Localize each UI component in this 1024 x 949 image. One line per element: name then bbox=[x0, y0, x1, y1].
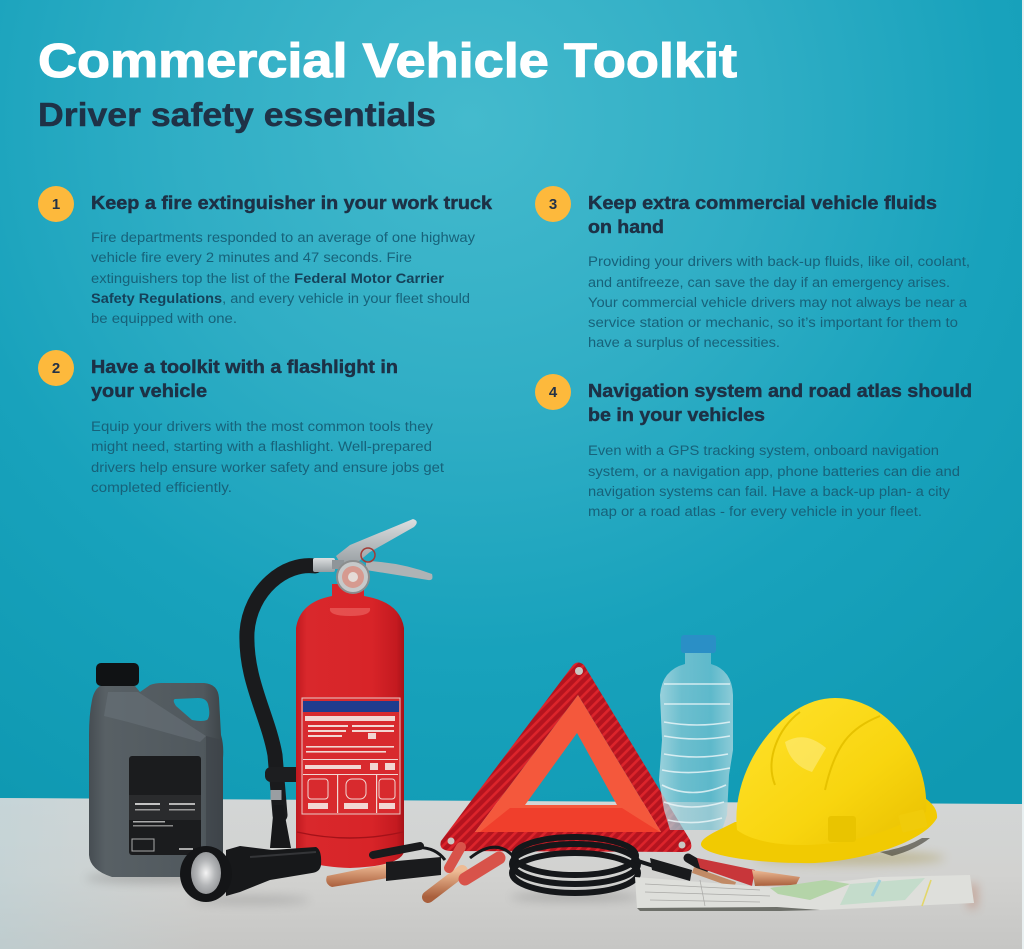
body 2 bbox=[91, 419, 444, 496]
jug body bbox=[89, 683, 223, 877]
heading 2: your vehicle bbox=[91, 380, 207, 401]
body 2: completed efficiently. bbox=[91, 480, 232, 496]
body 4: system, or a navigation app, phone batteries can die and bbox=[588, 464, 960, 480]
bottle body bbox=[659, 653, 733, 830]
title: Commercial Vehicle Toolkit bbox=[38, 35, 737, 88]
body 2: might need, starting with a flashlight. Well-prepared bbox=[91, 439, 432, 455]
second clamp pair bbox=[650, 858, 800, 886]
icon: fire extinguisher bbox=[247, 519, 432, 868]
icon: road map bbox=[635, 875, 974, 911]
number badge 2 bbox=[38, 350, 74, 386]
body 4: Even with a GPS tracking system, onboard navigation bbox=[588, 443, 939, 459]
body 4 bbox=[588, 443, 960, 520]
table surface bbox=[0, 798, 1024, 949]
body 3: and antifreeze, can save the day if an emergency arises. bbox=[588, 275, 950, 291]
tip 2: toolkit with flashlight bbox=[38, 350, 444, 496]
helmet ridges bbox=[772, 712, 880, 790]
body 1 bbox=[91, 230, 476, 327]
heading 4: Navigation system and road atlas should bbox=[588, 380, 972, 401]
body 3: Your commercial vehicle drivers may not always be near a bbox=[588, 295, 967, 311]
jug cap bbox=[96, 663, 139, 686]
heading 3: Keep extra commercial vehicle fluids bbox=[588, 192, 937, 213]
icon: yellow hard hat bbox=[701, 698, 937, 863]
bottle water ripples bbox=[662, 684, 730, 823]
heading 3 bbox=[588, 192, 937, 237]
tip 3: extra fluids bbox=[535, 186, 970, 351]
body 3 bbox=[588, 254, 970, 351]
tip 4: navigation bbox=[535, 374, 972, 520]
extinguisher cylinder bbox=[296, 584, 404, 868]
extinguisher valve and levers bbox=[313, 519, 432, 593]
icon: water bottle bbox=[659, 635, 733, 830]
helmet brim bbox=[701, 798, 937, 863]
triangle outer reflective frame bbox=[440, 662, 691, 852]
body 4: map or a road atlas - for every vehicle in your fleet. bbox=[588, 504, 922, 520]
icon: warning triangle bbox=[440, 662, 691, 852]
number badge 1: 1 bbox=[52, 196, 60, 213]
extinguisher hose bbox=[247, 566, 315, 848]
body 4: navigation systems can fail. Have a back-up plan- a city bbox=[588, 484, 951, 500]
number badge 2: 2 bbox=[52, 360, 60, 377]
number badge 4: 4 bbox=[549, 384, 558, 401]
heading 1: Keep a fire extinguisher in your work truck bbox=[91, 192, 493, 213]
icon: jumper cables bbox=[326, 837, 800, 897]
subtitle: Driver safety essentials bbox=[38, 96, 436, 133]
red clamp bbox=[428, 847, 499, 897]
helmet dome bbox=[736, 698, 926, 845]
heading 2 bbox=[91, 356, 398, 401]
triangle inner orange band bbox=[475, 695, 661, 832]
body 1: Fire departments responded to an average of one highway bbox=[91, 230, 476, 246]
cable coil bbox=[395, 837, 660, 893]
icon: flashlight bbox=[180, 846, 321, 902]
body 1: Safety Regulations, and every vehicle in your fleet should bbox=[91, 291, 470, 307]
black clamp bbox=[326, 846, 441, 887]
heading 4: be in your vehicles bbox=[588, 404, 765, 425]
icon: oil jug bbox=[89, 663, 223, 877]
body 3: service station or mechanic, so it’s important for them to bbox=[588, 315, 958, 331]
number badge 3: 3 bbox=[549, 196, 557, 213]
extinguisher label bbox=[302, 698, 400, 814]
body 1: vehicle fire every 2 minutes and 47 seconds. Fire bbox=[91, 250, 412, 266]
body 1: extinguishers top the list of the Federal Motor Carrier bbox=[91, 271, 444, 287]
number badge 4 bbox=[535, 374, 571, 410]
bottle cap bbox=[681, 635, 716, 653]
heading 4 bbox=[588, 380, 972, 425]
heading 3: on hand bbox=[588, 216, 664, 237]
jug label bbox=[129, 756, 201, 855]
number badge 1 bbox=[38, 186, 74, 222]
body 1: be equipped with one. bbox=[91, 311, 237, 327]
body 2: drivers help ensure worker safety and ensure jobs get bbox=[91, 460, 444, 476]
body 3: Providing your drivers with back-up fluids, like oil, coolant, bbox=[588, 254, 970, 270]
number badge 3 bbox=[535, 186, 571, 222]
tip 1: fire extinguisher bbox=[38, 186, 493, 327]
heading 2: Have a toolkit with a flashlight in bbox=[91, 356, 398, 377]
body 3: have a surplus of necessities. bbox=[588, 335, 780, 351]
body 2: Equip your drivers with the most common tools they bbox=[91, 419, 434, 435]
object shadows on table bbox=[85, 851, 977, 908]
